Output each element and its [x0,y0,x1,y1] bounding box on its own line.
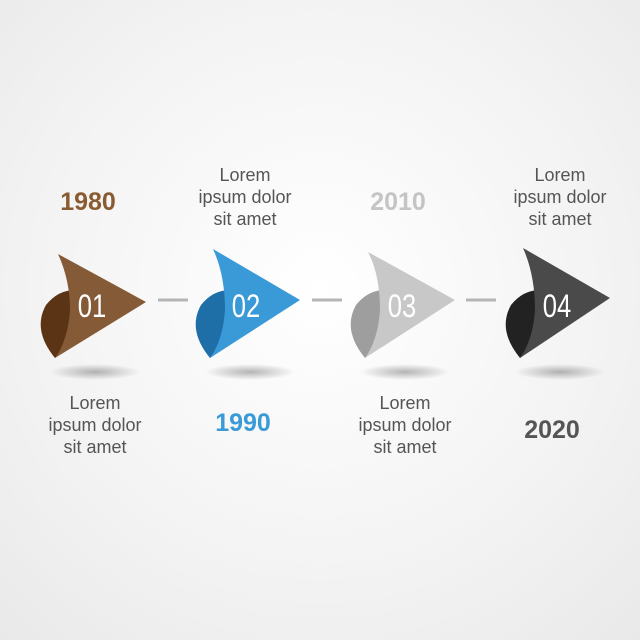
arrow 02 [196,249,300,380]
text bottom 3: Lorem [379,393,431,413]
text bottom 3: sit amet [373,437,437,457]
year 2020: 2020 [524,416,580,444]
text top 2 [198,165,292,229]
text bottom 1 [48,393,142,457]
arrow 04 [506,248,610,380]
arrow 02: 02 [232,289,260,325]
text bottom 1: sit amet [63,437,127,457]
connector dashes [158,298,496,302]
arrow 01 [41,254,146,380]
text bottom 1: Lorem [69,393,121,413]
arrow 04: 04 [543,289,571,325]
text top 4 [513,165,607,229]
arrow 03: 03 [388,289,416,325]
year 2010: 2010 [370,188,426,216]
text bottom 3 [358,393,452,457]
year 1990: 1990 [215,409,271,437]
text top 2: Lorem [219,165,271,185]
text bottom 1: ipsum dolor [48,415,142,435]
text top 2: sit amet [213,209,277,229]
text top 4: Lorem [534,165,586,185]
arrow 01: 01 [78,289,106,325]
arrow 03 [351,252,455,380]
text top 2: ipsum dolor [198,187,292,207]
year 1980: 1980 [60,188,116,216]
text bottom 3: ipsum dolor [358,415,452,435]
text top 4: sit amet [528,209,592,229]
text top 4: ipsum dolor [513,187,607,207]
